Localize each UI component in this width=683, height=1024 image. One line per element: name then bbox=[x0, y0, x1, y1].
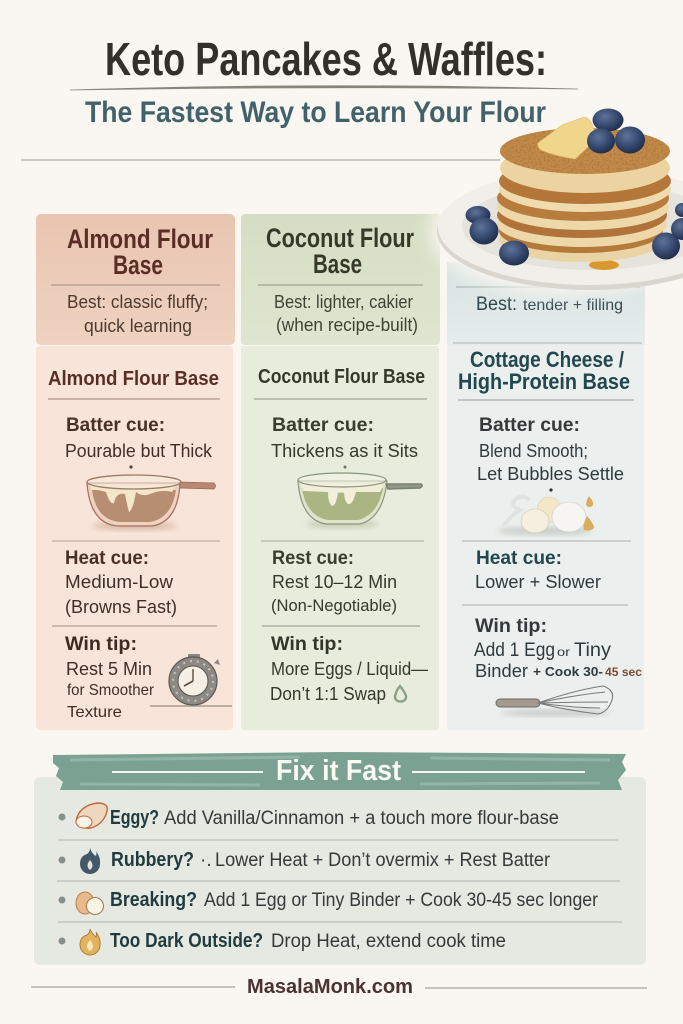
blueberries bbox=[466, 108, 683, 266]
batter cue: Batter cue: bbox=[272, 415, 374, 436]
row: eggy: Add Vanilla/Cinnamon + a touch more flour-base bbox=[164, 808, 559, 829]
icon: drop bbox=[395, 686, 406, 702]
row: too dark outside: Too Dark Outside? bbox=[110, 930, 263, 952]
win tip: Binder bbox=[475, 661, 528, 681]
subtitle: The Fastest Way to Learn Your Flour bbox=[85, 96, 546, 129]
row: breaking: Add 1 Egg or Tiny Binder + Cook 30-45 sec longer bbox=[204, 890, 599, 911]
batter cue bbox=[65, 415, 213, 461]
win tip bbox=[474, 616, 642, 681]
title: Keto Pancakes & Waffles: bbox=[105, 33, 547, 85]
syrup bbox=[589, 260, 619, 270]
panel: almond flour column bbox=[36, 346, 233, 730]
icon: batter bowl almond bbox=[87, 475, 216, 530]
win tip: Tiny bbox=[574, 640, 612, 661]
plate bbox=[437, 169, 683, 290]
win tip: More Eggs / Liquid— bbox=[271, 659, 428, 679]
panel: cottage cheese header bbox=[447, 262, 645, 345]
heading: cottage cheese high-protein base: High-Protein Base bbox=[458, 369, 630, 394]
win tip: Don’t 1:1 Swap bbox=[270, 684, 386, 704]
icon: eggs and cheese bbox=[497, 496, 594, 535]
heat cue: Lower + Slower bbox=[475, 572, 601, 592]
heading: cottage cheese high-protein base: Cottage Cheese / bbox=[470, 347, 624, 372]
rest cue: Rest 10–12 Min bbox=[272, 572, 397, 592]
batter cue: Thickens as it Sits bbox=[271, 441, 418, 461]
panel: coconut flour header: Base bbox=[313, 249, 362, 279]
panel: almond flour header bbox=[36, 214, 235, 345]
batter cue: Batter cue: bbox=[479, 415, 580, 436]
win tip bbox=[270, 634, 428, 704]
icon: batter bowl coconut bbox=[298, 473, 422, 528]
row: too dark outside: Drop Heat, extend cook time bbox=[271, 931, 506, 952]
rest cue: Rest cue: bbox=[272, 548, 354, 569]
panel: cottage cheese column bbox=[447, 345, 644, 730]
banner bbox=[53, 752, 626, 790]
win tip: 45 sec bbox=[605, 665, 642, 679]
win tip: + Cook 30- bbox=[533, 664, 603, 679]
row: too dark outside bbox=[58, 929, 506, 955]
panel: almond flour header: quick learning bbox=[84, 316, 192, 336]
panel: cottage cheese header: Best: bbox=[476, 294, 517, 315]
row: eggy: Eggy? bbox=[110, 807, 159, 829]
win tip: Win tip: bbox=[271, 634, 343, 655]
footer: website: MasalaMonk.com bbox=[247, 976, 413, 998]
win tip bbox=[65, 634, 155, 721]
win tip: Win tip: bbox=[65, 634, 137, 655]
heading: almond flour base: Almond Flour Base bbox=[48, 368, 219, 390]
heat cue: (Browns Fast) bbox=[65, 597, 177, 617]
win tip: Rest 5 Min bbox=[66, 659, 152, 679]
row: rubbery: Lower Heat + Don’t overmix + Rest Batter bbox=[215, 850, 551, 871]
rest cue: (Non-Negotiable) bbox=[271, 596, 397, 615]
row: eggy bbox=[58, 803, 559, 829]
row: breaking: Breaking? bbox=[110, 889, 197, 911]
panel: cottage cheese header: tender + filling bbox=[523, 297, 623, 314]
pancakes bbox=[497, 128, 671, 262]
butter bbox=[538, 117, 594, 159]
heat cue: Heat cue: bbox=[65, 548, 149, 569]
icon: stopwatch bbox=[150, 654, 232, 706]
icon: whisk bbox=[496, 686, 613, 716]
panel: coconut flour header: Coconut Flour bbox=[266, 223, 414, 253]
win tip: or bbox=[557, 645, 570, 659]
panel: coconut flour header bbox=[241, 214, 440, 345]
banner: Fix it Fast bbox=[276, 755, 401, 787]
batter cue bbox=[271, 415, 418, 461]
row: breaking bbox=[58, 889, 599, 914]
batter cue bbox=[477, 415, 624, 484]
panel: almond flour header: Best: classic fluffy; bbox=[67, 292, 208, 312]
pancake stack on plate bbox=[430, 108, 683, 294]
panel: almond flour header: Base bbox=[113, 250, 163, 280]
panel: coconut flour header: Best: lighter, cakier bbox=[274, 292, 413, 312]
rest cue bbox=[271, 548, 397, 615]
batter cue: Blend Smooth; bbox=[479, 441, 588, 461]
heat cue bbox=[475, 548, 601, 592]
row: rubbery bbox=[58, 848, 551, 874]
batter cue: Batter cue: bbox=[66, 415, 165, 436]
heat cue: Heat cue: bbox=[476, 548, 562, 569]
panel: fix it fast bbox=[34, 752, 646, 965]
row: rubbery: Rubbery? bbox=[111, 849, 194, 871]
panel: coconut flour header: (when recipe-built) bbox=[276, 315, 418, 335]
panel: almond flour header: Almond Flour bbox=[67, 224, 213, 254]
row: rubbery: ·. bbox=[200, 850, 212, 871]
batter cue: Pourable but Thick bbox=[65, 441, 213, 461]
panel: coconut flour column bbox=[241, 346, 439, 730]
heat cue: Medium-Low bbox=[65, 572, 174, 592]
heading: coconut flour base: Coconut Flour Base bbox=[258, 366, 425, 388]
heading: cottage cheese high-protein base bbox=[458, 347, 630, 394]
win tip: Win tip: bbox=[475, 616, 547, 637]
win tip: for Smoother bbox=[67, 682, 155, 699]
win tip: Texture bbox=[67, 704, 122, 721]
win tip: Add 1 Egg bbox=[474, 640, 555, 661]
batter cue: Let Bubbles Settle bbox=[477, 464, 624, 484]
heat cue bbox=[65, 548, 177, 617]
